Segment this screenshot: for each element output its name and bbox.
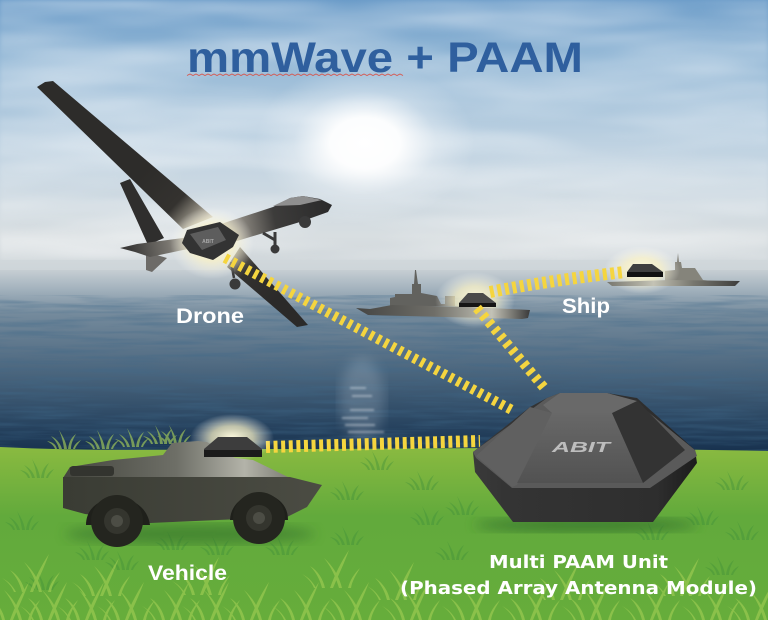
- ship right PAAM module: [627, 264, 663, 277]
- signal link: ship to ship: [490, 272, 625, 292]
- signal link: left ship to PAAM unit: [477, 308, 546, 390]
- glow on left ship: [435, 272, 515, 328]
- unit right face: [612, 400, 685, 483]
- unit body: [473, 393, 697, 522]
- drone PAAM module: ABIT: [202, 239, 214, 245]
- signal link: vehicle to PAAM unit: [266, 441, 480, 447]
- vehicle: [63, 414, 322, 547]
- drone lower wing: [227, 247, 308, 327]
- multi PAAM unit: [473, 393, 698, 532]
- drone: [37, 81, 332, 327]
- vehicle rear wheel: [91, 495, 143, 547]
- sea: [0, 270, 768, 455]
- vehicle rear stowage: [70, 466, 114, 476]
- drone canopy highlight: [273, 196, 322, 206]
- drone lower tail: [146, 252, 167, 272]
- ship left: [356, 270, 530, 328]
- sun: [255, 63, 475, 223]
- ship left superstructure: [390, 270, 455, 306]
- unit logo: ABIT: [550, 439, 613, 456]
- drone tail fin: [120, 179, 164, 245]
- label: Ship: Ship: [562, 295, 610, 318]
- label: Multi PAAM Unit: (Phased Array Antenna Module): [400, 578, 757, 599]
- ship left hull: [356, 305, 530, 319]
- unit front face: [517, 413, 643, 483]
- vehicle ground shadow: [65, 524, 315, 544]
- sky background: [0, 0, 768, 295]
- label: Drone: Drone: [176, 305, 244, 328]
- ship left PAAM module: [459, 293, 496, 307]
- label: Multi PAAM Unit: [400, 552, 757, 599]
- glow behind drone module: [170, 207, 254, 279]
- glow on right ship: [604, 246, 680, 294]
- drone PAAM module: [182, 222, 239, 260]
- ship right hull: [607, 280, 740, 286]
- vehicle upper deck: [63, 441, 290, 478]
- signal link: drone to PAAM unit: [225, 258, 512, 410]
- drone fuselage: [120, 196, 332, 257]
- vehicle PAAM module: [204, 437, 262, 457]
- drone landing gear: [230, 216, 310, 289]
- unit top lip: [473, 393, 697, 488]
- vehicle front wheel: [233, 492, 285, 544]
- ship right superstructure: [665, 253, 712, 282]
- vehicle hull: [63, 477, 322, 523]
- glow on vehicle: [190, 414, 274, 462]
- title: mmWave + PAAM: [187, 34, 583, 82]
- unit left face: [476, 407, 552, 487]
- grass field: [0, 425, 768, 620]
- label: Multi PAAM Unit: Multi PAAM Unit: [489, 552, 668, 573]
- vehicle wheel arches: [86, 494, 288, 525]
- label: Vehicle: Vehicle: [148, 562, 227, 585]
- ship right: [604, 246, 740, 294]
- drone upper wing: [37, 81, 213, 229]
- unit top face: [543, 393, 637, 413]
- unit shadow: [474, 518, 698, 532]
